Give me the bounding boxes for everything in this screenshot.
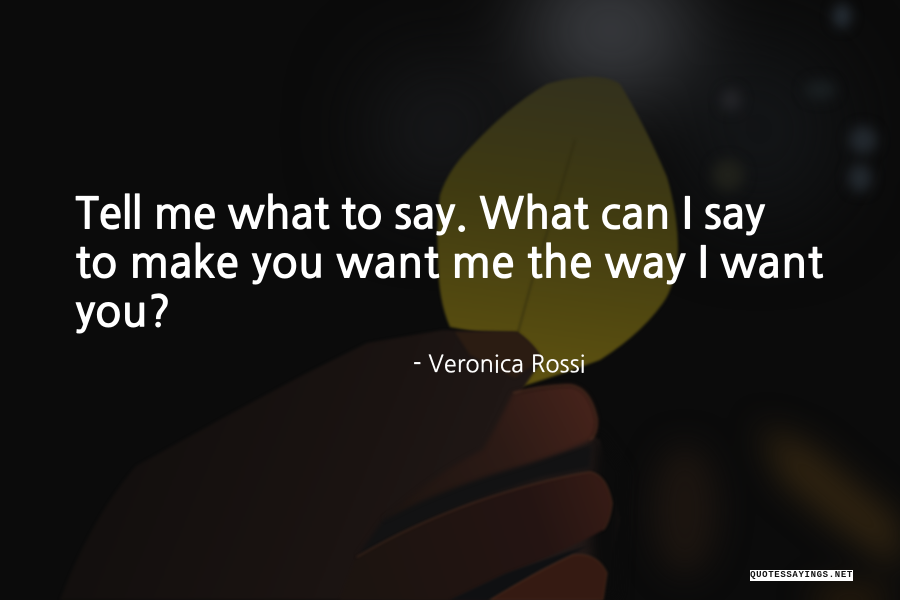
quote text xyxy=(75,192,824,334)
dark gap right of the fingers xyxy=(590,430,625,600)
watermark badge: QUOTESSAYINGS.NET xyxy=(750,570,853,580)
hand xyxy=(60,330,625,600)
quote text: to make you want me the way I want xyxy=(75,241,823,285)
second finger xyxy=(340,472,612,600)
author attribution: - Veronica Rossi xyxy=(413,353,586,376)
gap below second finger xyxy=(450,545,590,600)
quote text: Tell me what to say. What can I say xyxy=(75,192,764,236)
first finger rim xyxy=(513,385,597,440)
fingertip shadow on leaf xyxy=(455,332,542,378)
leaf veins xyxy=(517,140,575,336)
first finger xyxy=(383,385,597,520)
second finger rim xyxy=(357,472,612,557)
gap between fingers xyxy=(357,445,592,557)
warm streak at lower right xyxy=(653,425,900,600)
light glow at the top xyxy=(370,0,840,220)
bokeh spots at upper right xyxy=(712,4,877,192)
third finger xyxy=(490,555,607,600)
leaf xyxy=(437,77,678,388)
quote text: you? xyxy=(75,290,171,334)
